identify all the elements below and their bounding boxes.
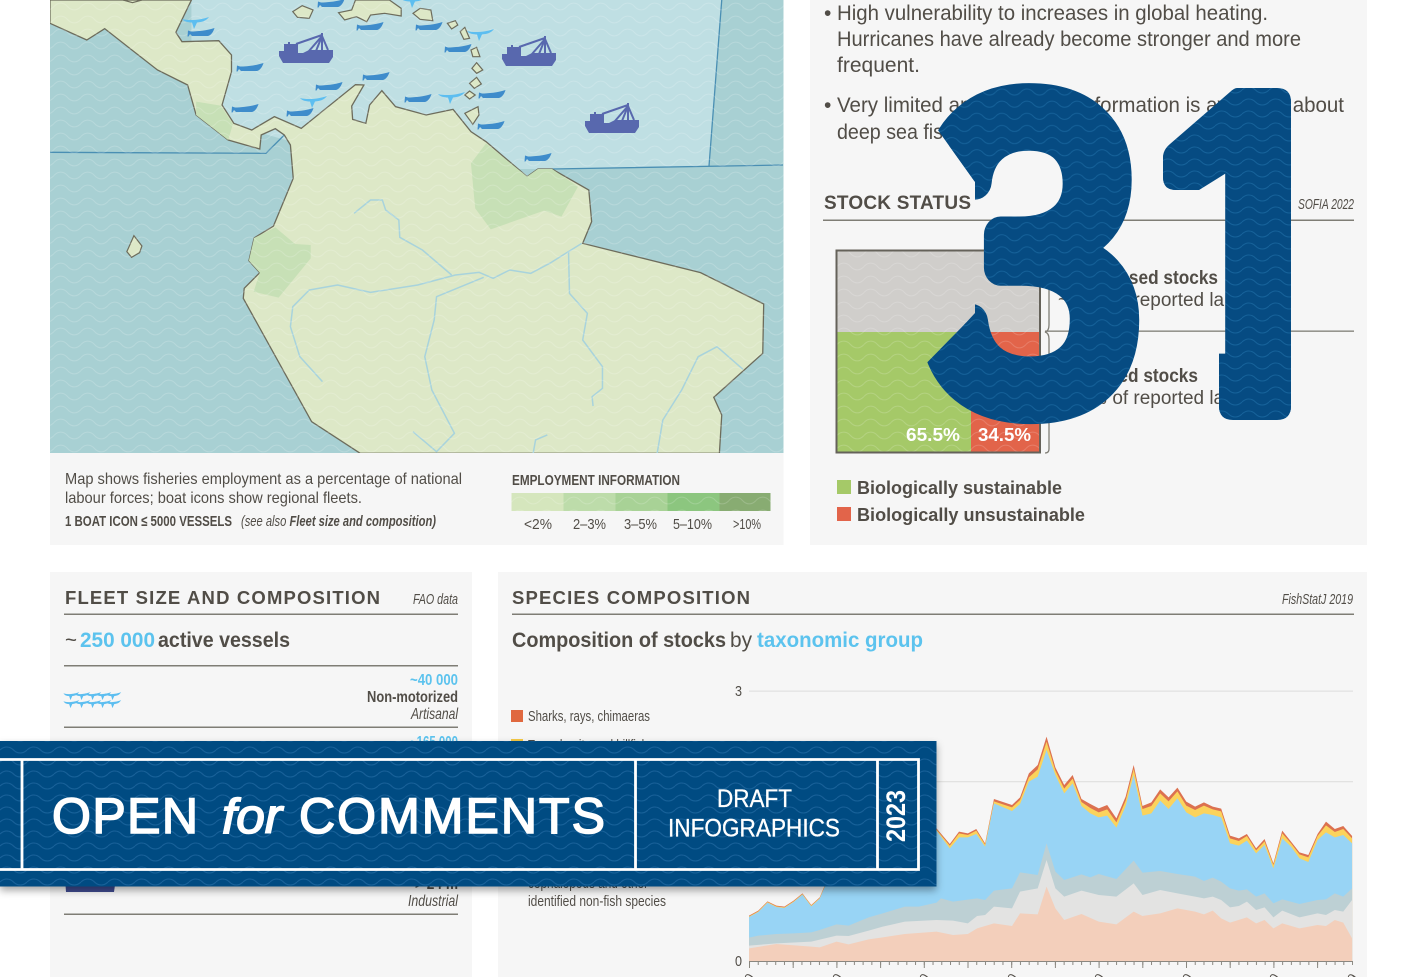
chart subtitle: taxonomic group [757, 629, 923, 652]
legend: employment information: 5–10% [673, 516, 712, 533]
heading: stock status [823, 193, 1354, 221]
heading: fleet size: FAO data [413, 591, 458, 608]
big number 31: 3 [920, 13, 1140, 493]
map illustration [50, 0, 784, 453]
panel: map [50, 0, 784, 545]
text block: bullet points [824, 2, 1344, 144]
legend: employment information: 3–5% [624, 516, 657, 533]
icons: fishing boats [182, 0, 639, 162]
heading: fleet size: FLEET SIZE AND COMPOSITION [65, 587, 380, 608]
stacked area chart: 0 [735, 953, 742, 970]
row: non-motorized: Non-motorized [367, 689, 458, 706]
big number 31: 1 [1131, 1, 1384, 509]
legend: taxonomic groups: Sharks, rays, chimaeras [528, 709, 650, 725]
text block: bullet points: • [824, 2, 831, 25]
icon: small boats [64, 693, 120, 707]
legend: employment information: 2–3% [573, 516, 606, 533]
chart subtitle: Composition of stocks [512, 629, 726, 652]
legend: taxonomic groups [511, 709, 666, 910]
banner title: for [222, 790, 284, 844]
stock status labels [1045, 268, 1354, 409]
heading: stock status: STOCK STATUS [824, 193, 971, 214]
banner subtitle [668, 785, 840, 842]
legend: employment information: EMPLOYMENT INFORMATION [512, 472, 680, 489]
heading: species composition: FishStatJ 2019 [1282, 591, 1353, 608]
stock status labels: Assessed stocks [1058, 366, 1198, 387]
banner year: 2023 [881, 790, 911, 842]
stock status labels: ~60% of reported landings [1058, 388, 1280, 409]
heading: species composition [512, 587, 1354, 615]
big number 31 [927, 83, 1291, 424]
row: industrial [64, 876, 458, 915]
stock status labels: ~40% of reported landings [1058, 290, 1280, 311]
row: non-motorized: Artisanal [410, 706, 458, 723]
chart: stock status square [836, 250, 1049, 453]
banner: open for comments [0, 741, 936, 886]
banner title: COMMENTS [299, 788, 605, 844]
legend: employment information: <2% [524, 516, 552, 533]
row: industrial: > 24 m [415, 876, 458, 893]
row: motorized, partly covered: ~165 000 [410, 734, 458, 751]
total vessels: ~ [65, 629, 77, 652]
map caption: labour forces; boat icons show regional fleets. [65, 490, 362, 507]
text block: bullet points: frequent. [837, 54, 920, 77]
legend: taxonomic groups: cephalopods and other [528, 876, 648, 892]
banner title: OPEN [52, 788, 198, 844]
row: industrial: Industrial [408, 893, 458, 910]
legend: sustainability: Biologically unsustainable [857, 505, 1085, 525]
legend: taxonomic groups: Tuna, bonito and billfish [528, 738, 648, 754]
legend: taxonomic groups: identified non-fish species [528, 894, 666, 910]
stock status labels: Unassessed stocks [1058, 268, 1218, 289]
panel: key points and stock status [810, 0, 1367, 545]
panel: fleet size and composition [50, 572, 472, 977]
heading: stock status: SOFIA 2022 [1298, 196, 1354, 213]
legend: employment information: >10% [733, 516, 761, 533]
chart subtitle: by [730, 629, 752, 652]
map caption: 1 BOAT ICON ≤ 5000 VESSELS [65, 513, 232, 530]
stacked area chart: 3 [735, 683, 742, 700]
chart: stock status square: 34.5% [978, 425, 1031, 445]
banner title [52, 788, 605, 844]
text block: bullet points: Very limited and scattered information is available about [837, 94, 1344, 117]
row: non-motorized: ~40 000 [410, 672, 458, 689]
map caption: Map shows fisheries employment as a percentage of national [65, 471, 462, 488]
legend: employment information [512, 472, 770, 533]
banner subtitle: INFOGRAPHICS [668, 814, 840, 842]
map caption: (see also Fleet size and composition) [241, 513, 436, 530]
text block: bullet points: High vulnerability to increases in global heating. [837, 2, 1268, 25]
row: non-motorized [64, 672, 458, 728]
heading: species composition: SPECIES COMPOSITION [512, 587, 750, 608]
total vessels [64, 629, 458, 666]
chart subtitle [512, 629, 923, 652]
chart: stock status square: 65.5% [906, 425, 960, 445]
heading: fleet size [64, 587, 458, 615]
text block: bullet points: Hurricanes have already become stronger and more [837, 28, 1301, 51]
map caption [65, 471, 462, 530]
text block: bullet points: deep sea fisheries. [837, 121, 1002, 144]
legend: sustainability [837, 478, 1085, 525]
total vessels: active vessels [158, 629, 290, 652]
legend: sustainability: Biologically sustainable [857, 478, 1062, 498]
banner subtitle: DRAFT [717, 785, 792, 813]
text block: bullet points: • [824, 94, 831, 117]
x axis [730, 961, 1361, 977]
total vessels: 250 000 [80, 629, 155, 652]
panel: species composition [498, 572, 1367, 977]
stacked area chart [730, 683, 1361, 977]
